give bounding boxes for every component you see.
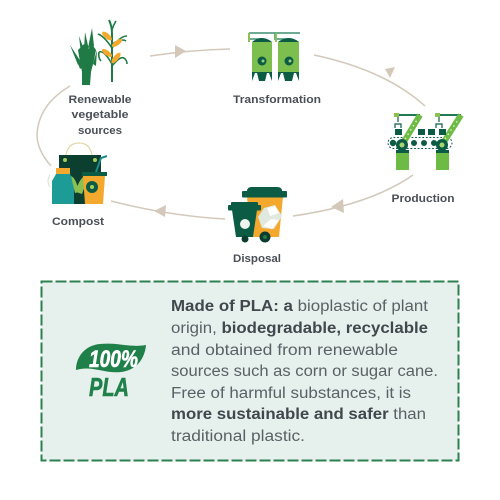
icon: compost products [48,143,107,204]
label: Disposal: Disposal [233,253,281,265]
icon: sugar cane and corn [70,20,127,85]
text block: PLA explanation: Made of PLA: a bioplastic of plant [171,298,429,315]
label: Compost: Compost [52,216,104,228]
label: Renewable vegetable sources: sources [78,125,122,137]
icon: 100% PLA badge: 100% [89,346,138,373]
label: Renewable vegetable sources: Renewable [68,94,132,106]
text block: PLA explanation: and obtained from renewable [171,342,398,359]
label: Transformation: Transformation [233,94,321,106]
text block: PLA explanation: sources such as corn or sugar cane. [171,363,438,380]
text block: PLA explanation: traditional plastic. [171,428,305,445]
arrow: compost to sources [37,86,70,166]
arrow: production to disposal [293,175,413,216]
text block: PLA explanation: origin, biodegradable, recyclable [171,320,428,337]
icon: recycling bins [228,187,287,242]
icon: production robots [388,113,461,170]
text block: PLA explanation: more sustainable and safer than [171,406,426,423]
text block: PLA explanation [171,298,438,445]
arrow: sources to transformation [150,45,230,58]
arrow: disposal to compost [111,201,225,219]
text block: PLA explanation: Free of harmful substances, it is [171,385,411,402]
arrow: transformation to production [314,55,425,106]
label: Renewable vegetable sources [68,94,132,137]
icon: fermentation tanks [248,33,300,81]
icon: 100% PLA badge [76,344,146,402]
panel: PLA description [42,282,458,460]
label: Renewable vegetable sources: vegetable [72,109,128,121]
icon: 100% PLA badge: PLA [89,372,129,402]
label: Production: Production [392,193,455,205]
